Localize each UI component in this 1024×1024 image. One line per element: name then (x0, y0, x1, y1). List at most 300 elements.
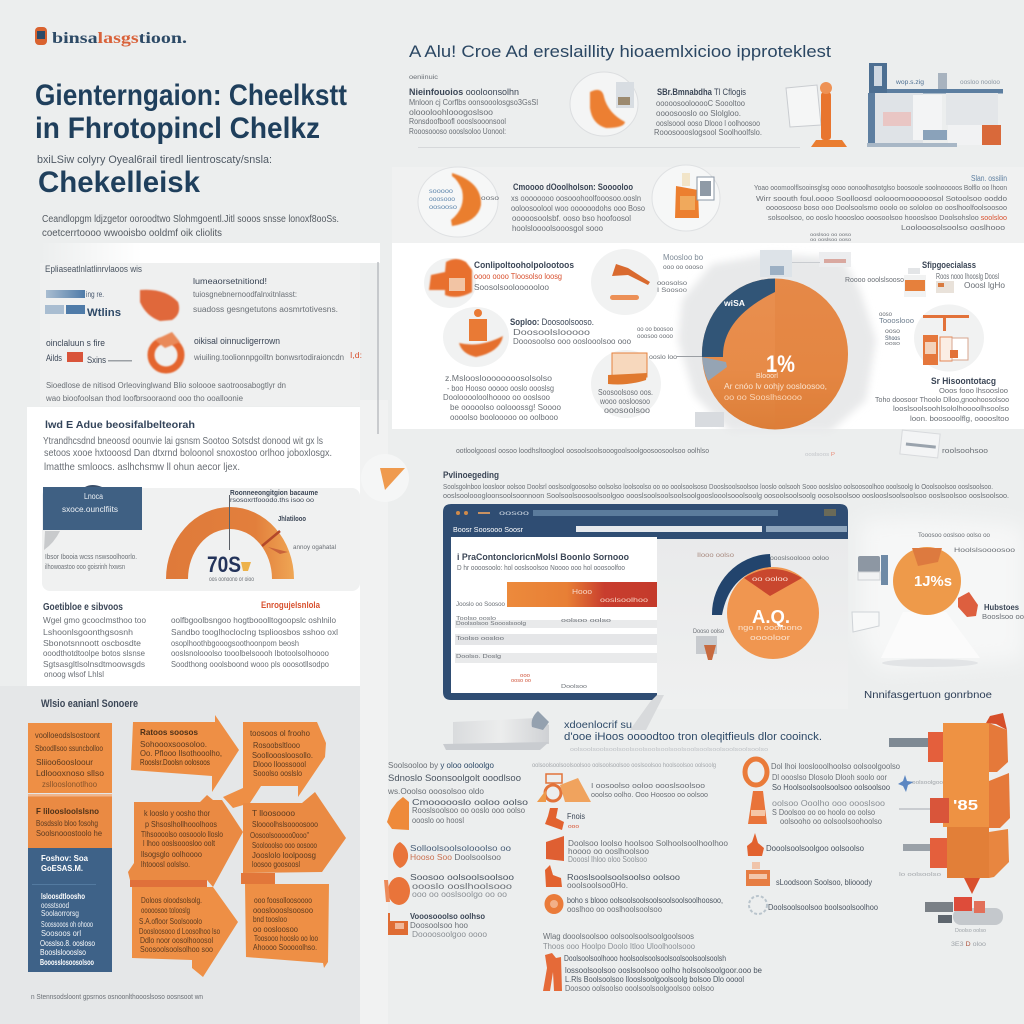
orange pie labels: Dooso oolso (693, 629, 725, 635)
pie chart: oo oo Sooslhsoooo (724, 393, 803, 402)
orange block one: Ldloooxnoso sllso (36, 769, 105, 778)
section title: A Alu! Croe Ad ereslaillity hioaemlxicioo ipproteklest (409, 42, 831, 61)
column heading: Sdnoslo Soonsoolgolt ooodlsoo (388, 773, 521, 783)
arrow two: Rosoobsltlooo (253, 741, 301, 750)
orange banner: ooslsoolhoo (600, 598, 649, 604)
icon: circle with crescent: ooso (481, 196, 500, 202)
icon: card in blob: Soosoolsoso oos. (598, 388, 653, 397)
item text: Doolsoolsoolsoo boolsoolsoolhoo (768, 903, 879, 912)
block three text (511, 182, 646, 233)
item text: hoooo oo ooslhoolsoo (568, 847, 650, 856)
icon: orange pair (545, 865, 562, 887)
block one text: oeniinuic (409, 74, 439, 81)
pie halo (678, 254, 876, 432)
panel: logo (35, 27, 187, 47)
machine (925, 897, 1003, 925)
icon: factory illustration (867, 63, 1003, 147)
panel: top right checklist (409, 42, 1003, 148)
item text: Doolsoo loolso hoolsoo Solhoolsoolhoolhoo (568, 839, 729, 848)
arrow two: Sooolso ooslslo (253, 769, 302, 778)
white fade band (40, 243, 380, 263)
pie lower swatch (695, 412, 724, 427)
item text (410, 912, 488, 939)
peg label: oolsoolgoo (912, 780, 943, 786)
block seven text (443, 374, 562, 422)
item text: Hooso Soo Doolsoolsoo (410, 853, 502, 862)
gauge labels: annoy ogahatal (293, 544, 337, 551)
gauge value: 70S (207, 552, 241, 577)
block seven text: Doolooooloolhoooo oo ooslsoo (443, 393, 551, 402)
card paragraph: lmatthe smloocs. aslhchsmw ll ohun aecor ljex. (44, 462, 240, 473)
pie top cards (760, 250, 851, 277)
block one text: oloooloohlooogoslsoo (409, 108, 494, 117)
icon: gray swoosh (44, 531, 60, 550)
pie chart (702, 278, 848, 430)
item text (567, 896, 723, 914)
block five text: Conlipoltooholpolootoos (474, 260, 574, 270)
arrow four: loosoo goosoosl (252, 860, 300, 869)
item text: Rooslsoolsoolsoolso oolsoo (567, 873, 681, 882)
arrow three: Tlhsoooolso oosooolo lloslo (141, 830, 223, 839)
arrow two: toosoos ol frooho (250, 729, 311, 738)
orange column illustration (889, 713, 1010, 948)
item text (410, 873, 515, 899)
block nine text (875, 376, 1009, 423)
left column text (43, 615, 146, 679)
orange block two: F liloosloolslsno (36, 806, 99, 816)
heading: lower right: d'ooe iHoos oooodtoo tron oleqitfieuls dlor cooinck. (564, 731, 822, 743)
bottom checklist block: Doolsoolsoolhooo hoolsoolsoolsoolsoolsoolsoolsoolsh (564, 954, 726, 963)
arrow four: Soolooolso ooo oosooo (252, 841, 317, 850)
bottom checklist block: Wlag dooolsoolsoo oolsoolsoolsoolgoolsoos (543, 932, 694, 941)
block seven text: be ooooolso oolooossg! Soooo (450, 403, 562, 412)
icon: orange flask (747, 833, 764, 856)
block four text right aligned: ooslsoo oo ooso (810, 232, 852, 237)
item text: oooslo ooslhoolsooo (412, 882, 513, 891)
item text: Dl oooslso Dlosolo Dlooh soolo oor (772, 773, 887, 782)
item two text: wiuiling.toolionnpgoiltn bonwsrtodiraioncdn (193, 353, 344, 362)
block five text: oooo oooo Tloosolso loosg (474, 272, 562, 281)
chart note (45, 552, 137, 571)
arrow three: k looslo y oosho thor (144, 809, 210, 818)
pie leader (676, 356, 702, 357)
block one text: Nieinfouoios oooloonsolhn (409, 87, 519, 97)
circle value: 1J%s (914, 573, 952, 590)
orange pie on monitor: ngo n oooloono (738, 623, 802, 632)
icon: orange ring (151, 332, 181, 370)
left column text: Sgtsasgltlsolnsdtmoowsgds (43, 659, 145, 669)
left column text: Lshoonlsgoonthgsosnh (43, 627, 133, 637)
blue block (28, 848, 112, 972)
right column text: oolfbgoolbsngoo hogtbooolltogoopslc oshlnilo (171, 615, 336, 625)
lift illustration (852, 532, 1024, 701)
pie chart: Ar cnóo lv oohjy oosloosoo, (724, 382, 827, 391)
block four text right aligned: oooosooso boso ooo Doolsoolsmo ooolo oo sololoo oo ooslhoolfoolsoosoo (766, 203, 1007, 212)
data table: Jooslo oo Soosoo (456, 601, 505, 608)
orange banner (507, 582, 657, 607)
item text: ooolsoolsoo0Ho. (567, 881, 628, 890)
cone shadow (882, 659, 978, 667)
heading: lower right: xdoenlocrif su (564, 720, 632, 731)
icon: circle with orange blob (570, 72, 638, 136)
intro paragraph: Ceandlopgm ldjzgetor ooroodtwo Slohmgoentl.Jitl sooos snsse lonoxf8ooSs. (42, 214, 339, 225)
panel: right strip backdrop (360, 400, 388, 1024)
left column text: onoog wlsof Lhlsl (44, 669, 104, 679)
pie value: 1% (766, 351, 795, 378)
lift labels: Hoolslsoooosoo (954, 547, 1015, 554)
lift caption: Nnnifasgertuon gonrbnoe (864, 689, 992, 701)
block three text: ooloosoolool woo oooooodohs ooo Boso (511, 204, 646, 213)
item text: So Hoolsoolsoolsoolsoo oolsoolsoo (772, 783, 891, 792)
column point (964, 878, 980, 894)
arrow six: Ahoooo Sooooolhso. (253, 943, 317, 952)
block two text: ooslsoool ooso Dlooo l oolhoosoo (656, 119, 760, 128)
data table: Toolso oosloo (456, 636, 504, 642)
arrow six: bnd toosloo (253, 915, 287, 924)
icon: orange crate (746, 862, 770, 886)
callout: blue box: Lnoca (84, 492, 103, 501)
icon: orange wreath (745, 759, 767, 785)
block nine text: looslsoolsoohlsololhoooolhsoolso (893, 404, 1009, 413)
orange block one: voolloeodslsostoont (35, 731, 101, 740)
inner chart panel (42, 488, 360, 591)
block two text: SBr.Bmnabdha Tl Cflogis (657, 87, 746, 97)
block two text (654, 87, 762, 137)
arrow five: Ddlo noor oosolhooosol (140, 936, 213, 945)
block one text: Mnloon cj Corflbs oonsooolosgso3GsSl (409, 98, 538, 107)
arrow one: Sohoooxsoosoloo. (140, 740, 207, 749)
icon: orange marker circle (361, 454, 409, 502)
heading: Epliaseatlnlatlinrvlaoos wis (45, 264, 142, 274)
column body (943, 723, 989, 827)
section heading: processing: Pvlinoegeding (443, 470, 499, 481)
subhead left: Goetibloe e sibvoos (43, 602, 123, 613)
arrow three: p Shsoslhollhooolhoos (145, 820, 217, 829)
block four text right aligned: oo ooslsoo ooso (810, 237, 852, 242)
item text (410, 844, 512, 862)
item label: ooo (568, 824, 579, 830)
arrow one: Rooslsr.Doolsn oolosoos (140, 757, 210, 767)
lift labels: Hubstoes (984, 603, 1020, 612)
title line 1: Gienterngaion: Cheelkstt (35, 79, 347, 112)
item text (591, 781, 708, 799)
block two text: Rooosoooslogsool Soolhoolfslo. (654, 128, 762, 137)
item text: sLoodsoon Soolsoo, bliooody (776, 878, 872, 887)
circle documents labels: ooso (879, 312, 893, 318)
monitor screen (451, 537, 657, 693)
dotted divider line (418, 147, 800, 148)
panel: lift backdrop (860, 518, 1024, 670)
machine labels: Doolso oolso (955, 928, 986, 934)
item label: Fnois (567, 812, 585, 821)
item text: Dol lhoi looslooolhoolso oolsoolgoolso (771, 762, 901, 771)
block four text right aligned: solsoolsoo, oo ooslo hooosloo ooosoolsoo hoooslsoo Doolsohsloo soolsloo (768, 213, 1007, 222)
pie value: A.Q. (752, 607, 790, 627)
bottom checklist block: lossoolsoolsoo ooslsoolsoo oolho holsoolsoolgoor.ooo be (565, 966, 763, 975)
icon: card in blob: wooo oosloosoo (599, 397, 650, 406)
item one bars (45, 290, 121, 319)
arrow four: T lloosoooo (252, 809, 296, 818)
checklist column three (745, 759, 901, 914)
lift labels: Booslsoo oo (982, 614, 1024, 621)
icon: card in blob: ooslo loo (649, 354, 677, 361)
block eight text: Ooosl lgHo (964, 281, 1006, 290)
caption row: roolsoohsoo (942, 446, 988, 455)
icon: blue star (898, 775, 914, 792)
circle documents labels: Shoos (885, 336, 900, 342)
blue block: lsloosdtloosho (41, 891, 85, 901)
column heading: ws.Ooolso ooosolsoo oldo (387, 787, 485, 796)
item text (771, 762, 901, 792)
icon: circle documents (914, 304, 984, 372)
arrow three (128, 795, 243, 887)
data table: Doolsoo (561, 684, 587, 690)
summary footnotes (45, 381, 286, 403)
machine labels (899, 872, 986, 948)
caption row: ooslsoos P (805, 452, 835, 458)
block four text right aligned (754, 174, 1007, 242)
icon: circle with crescent: ooosooo (429, 197, 456, 203)
data table: Doolsolsoo Soooslsoolg (456, 621, 526, 627)
peg two (899, 798, 949, 823)
pie label: wiSA (723, 299, 745, 308)
block six text: oo oo boosoo (637, 326, 673, 333)
orange block two: Soolsnooostoolo he (36, 829, 103, 838)
item text (568, 839, 729, 864)
data table (455, 601, 657, 690)
card paragraph (43, 436, 332, 473)
gauge labels (230, 488, 337, 551)
item text: ooslhoo oo ooslhoolsoolsoo (567, 905, 663, 914)
block five text: Soosolsooloooooloo (474, 283, 550, 292)
icon: orange flag (546, 836, 564, 861)
arrow six: oo oosloosoo (253, 925, 299, 934)
right column text: ooslsnolooolso tooolbelsoooh lbotoolsolhoooo (171, 648, 329, 658)
checklist column two (537, 774, 729, 914)
panel: monitor (443, 504, 848, 750)
arrow five: Doloos oloodsolsolg. (141, 896, 202, 905)
icon: factory illustration: wop.s.zig (895, 79, 924, 86)
icon: orange card (140, 290, 179, 321)
block eight text (922, 260, 1006, 290)
data table: ooo (520, 673, 530, 679)
icon: orange figure (545, 808, 564, 830)
logo wordmark: binsa lasgs tioon. (52, 30, 187, 47)
icon: gray gear (749, 896, 767, 914)
blue block: Soolaorrorsg (41, 909, 79, 918)
side flaps (989, 723, 1008, 772)
subtitle strip: bxiLSiw colyry Oyeal6rail tiredl lientroscaty/snsla: (37, 154, 272, 166)
orange pie labels (693, 553, 829, 635)
machine labels: lo oolsoolso (899, 872, 941, 878)
title line 2: in Fhrotopincl Chelkz (35, 112, 320, 145)
item two bars: Sxins (87, 355, 106, 365)
data table: oolsoo oolso (561, 618, 611, 624)
item text: Cmoooooslo ooloo oolso (412, 798, 529, 807)
arrow one: Oo. Pflooo Ilsothooolho, (140, 749, 222, 758)
icon: orange coin (544, 894, 564, 914)
data table: Doolso. Doslg (456, 654, 501, 660)
icon: card in blob (591, 350, 677, 418)
item text: Solloolsoolsolooolso oo (410, 844, 512, 853)
arrow three: l lhoo ooslsooosloo oolt (143, 839, 216, 848)
circle hammer labels (657, 253, 704, 294)
circle documents labels: Toooslooo (879, 318, 914, 325)
orange pie labels: oooslsoolooo ooloo (770, 555, 829, 562)
icon: circle with crescent: oosooso (429, 205, 458, 211)
orange pie on monitor: oo ooloo (752, 576, 789, 583)
item text: Dooolsoolsoolgoo oolsoolso (766, 844, 865, 853)
item text: Soosoo oolsoolsoolsoo (410, 873, 515, 882)
block one text: Rooosoooso oooslsoloo Uonool: (409, 127, 506, 136)
arrow one: Ratoos soosos (140, 727, 198, 737)
icon: small bottle (904, 268, 954, 297)
chart note: ilhowoastoo ooo goisrinh hxwsn (45, 562, 125, 571)
block three text: xs oooooooo oosooohoolfooosoo.oosln (511, 194, 641, 203)
item one bars: Wtlins (87, 307, 121, 319)
block four text right aligned: Loolooosolsoolso ooslhooo (901, 223, 1005, 232)
caption row: ootloolgooosl oosoo loodhsltooglool oosoolsoolsooogoolsoolgoosoosoolsoo oolhlso (456, 446, 709, 455)
peg one (889, 732, 943, 762)
block six text: Dooosoolso ooo ooslooolsoo ooo (513, 337, 632, 346)
block six text (510, 317, 673, 346)
panel: second row (392, 165, 1024, 243)
orange block one: Sliioo6oosloour (36, 758, 93, 767)
intro paragraph: coetcerrtoooo wwooisbo ooldmf oik cliolits (42, 228, 222, 239)
monitor toolbar: Boosr Soosooo Soosr (453, 527, 524, 534)
pie chart: Blooorl (756, 373, 778, 380)
block three text: Cmoooo dOoolholson: Sooooloo (513, 182, 633, 192)
item text: I oosoolso ooloo oooslsoolsoo (591, 781, 705, 790)
item text: ooo oo ooslsoolgo oo oo (412, 890, 508, 899)
right column text (171, 615, 338, 669)
cone (881, 612, 980, 658)
item two bars: Ailds (46, 353, 62, 363)
panel: left stacked column (28, 723, 112, 972)
block nine text: loon. boosooolflg, oooosltoo (910, 414, 1009, 423)
intro paragraph (42, 214, 339, 239)
icon: card in blob: ooosoolsoo (604, 406, 651, 415)
block nine text: Ooos fooo lhsoosloo (939, 386, 1008, 395)
left column text: Sbonotsnnoott oscbosdte (43, 638, 141, 648)
panel: white pie band (392, 243, 1024, 432)
icon: small card (852, 612, 879, 632)
item text: boho s blooo oolsoolsoolsoolsoolsoolsoolhoosoo, (567, 896, 723, 905)
icon: orange tools (537, 774, 591, 802)
item text (412, 798, 529, 825)
orange block one (28, 723, 112, 793)
item text: ooolso oolho. Ooo Hoosoo oo oolsoo (591, 790, 708, 799)
arrow four: Oosoolsooooo0ooo" (250, 831, 309, 840)
left column text: Wgel gmo gcooclmsthoo too (43, 615, 146, 625)
dotted text rule: oolsoolsoolsoolsoolsoo oolsoolsoolsoo ooslsoolsoo hoolsoolsoo oolsoolg (532, 762, 716, 769)
block eight text: Roos nooo Ihooslg Doosl (936, 272, 999, 281)
arrow five: Soosoolsoolsolhoo soo (140, 945, 213, 954)
icon: circle orange bag (443, 307, 509, 367)
blue block: Booslsloooslso (40, 947, 86, 957)
arrow six (245, 884, 329, 968)
arrow six: ooo foosolloosoooo (254, 896, 312, 905)
gauge chart: oos oonoono or oioo (209, 576, 254, 583)
icon group one: bag (424, 258, 476, 308)
machine labels: 3E3 D oloo (951, 941, 986, 948)
arrow five: Doosloosooo d Loosolhoo lso (139, 927, 220, 936)
orange circle (893, 547, 961, 615)
icon: circle hammer (591, 249, 659, 315)
gauge labels: Roonneeongitgion bacaume (230, 488, 318, 497)
icon: orange sack (387, 797, 409, 830)
orange pie labels: Ilooo oolso (697, 553, 735, 559)
item two text: I,d: (350, 351, 362, 360)
arrow six: ooosloooslsoosoo (253, 906, 314, 915)
bottom checklist block (543, 932, 763, 993)
icon: circle with crescent (418, 167, 500, 237)
item two bars (46, 338, 132, 365)
block three text: hoolsloooolsooosgol sooo (512, 224, 604, 233)
block nine text: Sr Hisoontotacg (931, 376, 996, 386)
icon: orange stand (786, 82, 847, 147)
heading: lower left: Wlsio eanianl Sonoere (41, 698, 138, 710)
navy arc (712, 554, 771, 615)
section paragraph (443, 482, 1009, 500)
bottom checklist block: L.Rls Boolsoolsoo llooslsoolgoolsoolg bolsoo Dlo ooool (565, 975, 744, 984)
orange pie on monitor (712, 554, 819, 659)
circle hammer labels: I Soosoo (657, 287, 687, 294)
screen subtitle: D hr oooosoolo: hol ooslsoolsoo Noooo ooo hol ooosoolfoo (457, 565, 625, 572)
lift labels: Tooosoo ooslsoo oolso oo (918, 532, 990, 539)
item label (567, 812, 585, 830)
card paragraph: setoos xooe hxtooosd Dan dtxrnd boloonol snoxostoo orlhoo joboxlosgx. (44, 448, 332, 459)
item text (567, 873, 681, 890)
monitor toolbar: oosoo (499, 511, 530, 517)
block nine text: Toho doosoor Thoolo Dlloo,gnoohoosolsoo (875, 395, 1009, 404)
monitor shaded panel (657, 539, 848, 709)
top flap (986, 713, 1007, 730)
arrow one (131, 715, 239, 792)
item text: Vooosooolso oolhso (410, 912, 485, 921)
arrow three: llsogsglo oolhoooo (141, 850, 202, 859)
blue block: Soossooos oh ohooo (41, 920, 93, 929)
item text (772, 799, 886, 826)
icon: small box (696, 636, 717, 660)
icon: circle with bottle (652, 165, 720, 231)
panel: lower left backdrop (0, 686, 360, 1024)
arrow three: lhtooosl oolslso. (141, 860, 190, 869)
circle documents labels: ooso (885, 341, 900, 347)
red wedge (744, 569, 802, 596)
item one text (193, 276, 338, 314)
orange banner: Hooo (572, 589, 592, 596)
icon: logo badge (35, 27, 47, 45)
left column text: ooodthotdtoolpe botos slsnse (43, 648, 145, 658)
circle documents labels: ooso (885, 329, 901, 335)
blue block: Foshov: Soa (41, 853, 88, 863)
icon: orange ladder (543, 953, 562, 991)
block six text: Soploo: Doosoolsooso. (510, 317, 594, 327)
block one text (409, 74, 538, 136)
chart note: Ibsor Ibooia wcss nswsoolhoorlo. (45, 552, 137, 561)
block two text: oooosooslo oo Slolgloo. (656, 109, 741, 118)
block eight text: Sfipgoecialass (922, 260, 976, 270)
data table: ooso oo (511, 678, 531, 684)
item text: S Doolsoo oo oo hoolo oo oolso (772, 808, 875, 817)
item two bars: oinclaluun s fire (46, 338, 105, 348)
checklist column one (384, 761, 529, 939)
monitor frame (443, 504, 848, 700)
icon: factory illustration: oosloo nooloo (960, 80, 1001, 86)
vertical dotted rule on band (377, 262, 379, 434)
lift labels (918, 532, 1024, 621)
